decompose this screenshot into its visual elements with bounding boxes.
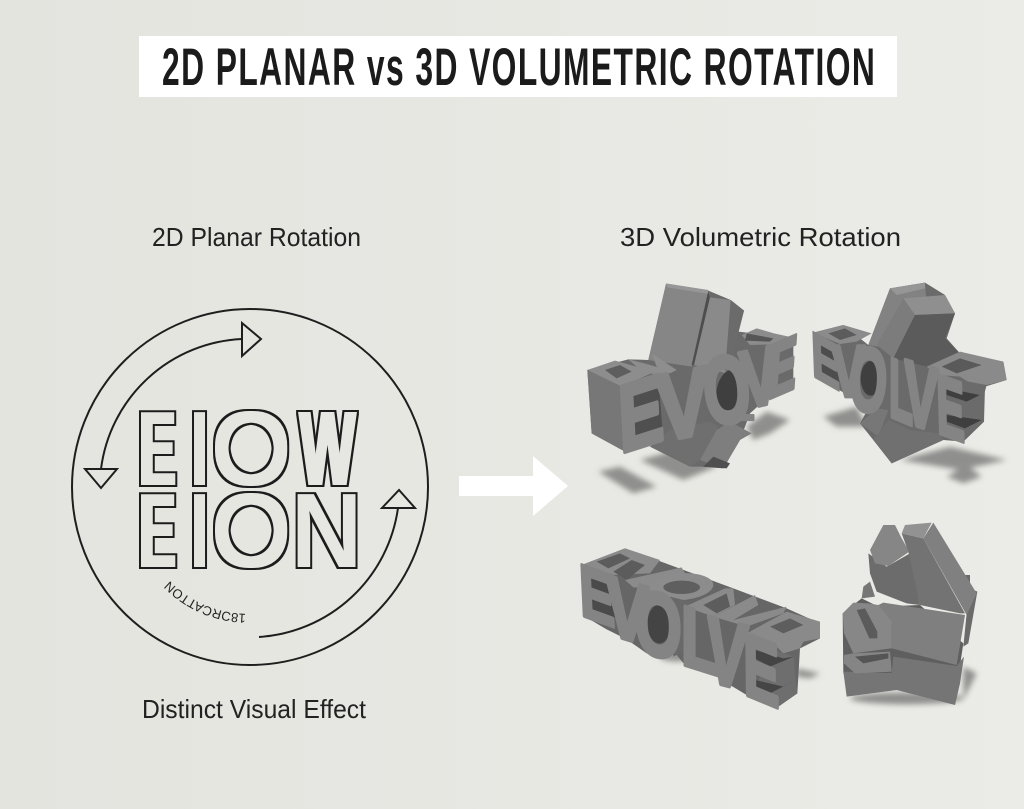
3D object: top left EVOLVE: O bbox=[700, 337, 754, 443]
outlined letters bottom row: E bbox=[139, 471, 175, 590]
3D object: bottom left EVOLVE: E bbox=[577, 547, 616, 643]
outlined letters bottom row bbox=[139, 471, 362, 590]
outlined letters top row: O bbox=[212, 393, 290, 505]
outlined letters top row: E bbox=[139, 389, 175, 508]
3D object: bottom left EVOLVE: V bbox=[604, 558, 651, 665]
3D object: top left EVOLVE bbox=[587, 283, 800, 493]
3D object: top right EVOLVE: V bbox=[902, 340, 939, 451]
panel: 2D planar rotation bbox=[71, 222, 429, 724]
3D object: top left EVOLVE: V bbox=[736, 327, 783, 426]
3D object: top left EVOLVE: L bbox=[738, 380, 755, 430]
3D object: top right EVOLVE: E bbox=[810, 319, 841, 406]
outlined letters bottom row: N bbox=[291, 471, 362, 590]
arrow: 2D to 3D bbox=[459, 456, 568, 516]
3D object: bottom left EVOLVE: O bbox=[635, 571, 682, 680]
outlined letters top row bbox=[139, 389, 355, 509]
3D object: top right EVOLVE: L bbox=[889, 340, 913, 445]
curved rotated caption: 18ƆRCATTON bbox=[164, 581, 245, 623]
outlined letters top row: W bbox=[300, 391, 355, 509]
icon: arrow bottom right bbox=[259, 490, 415, 637]
3D object: top left EVOLVE: E bbox=[766, 317, 800, 417]
3D object: bottom left EVOLVE: E bbox=[743, 614, 780, 728]
outlined letters bottom row: O bbox=[212, 475, 290, 587]
title banner: 2D PLANAR vs 3D VOLUMETRIC ROTATION bbox=[162, 38, 875, 97]
icon: clockwise arrow top bbox=[85, 323, 261, 488]
caption: distinct visual effect: Distinct Visual Effect bbox=[142, 694, 367, 724]
3D object: top right EVOLVE bbox=[810, 283, 1007, 483]
heading: 2D planar rotation: 2D Planar Rotation bbox=[152, 222, 361, 252]
3D object: top left EVOLVE: V bbox=[653, 347, 713, 462]
3D object: bottom right tumbled block bbox=[843, 523, 977, 705]
3D object: top right EVOLVE: O bbox=[848, 330, 889, 432]
heading: 3D volumetric rotation: 3D Volumetric Rotation bbox=[620, 222, 901, 252]
3D object: bottom left EVOLVE: V bbox=[704, 597, 750, 710]
outer circle bbox=[72, 309, 428, 665]
3D object: bottom left EVOLVE bbox=[577, 547, 820, 728]
3D object: bottom left EVOLVE: L bbox=[681, 589, 719, 695]
3D object: top right EVOLVE: E bbox=[935, 357, 966, 461]
3D object: top left EVOLVE: E bbox=[616, 354, 666, 474]
outlined letters bottom row: I bbox=[193, 472, 206, 590]
outlined letters top row: I bbox=[193, 390, 206, 508]
3D object: top right EVOLVE: V bbox=[831, 332, 866, 413]
